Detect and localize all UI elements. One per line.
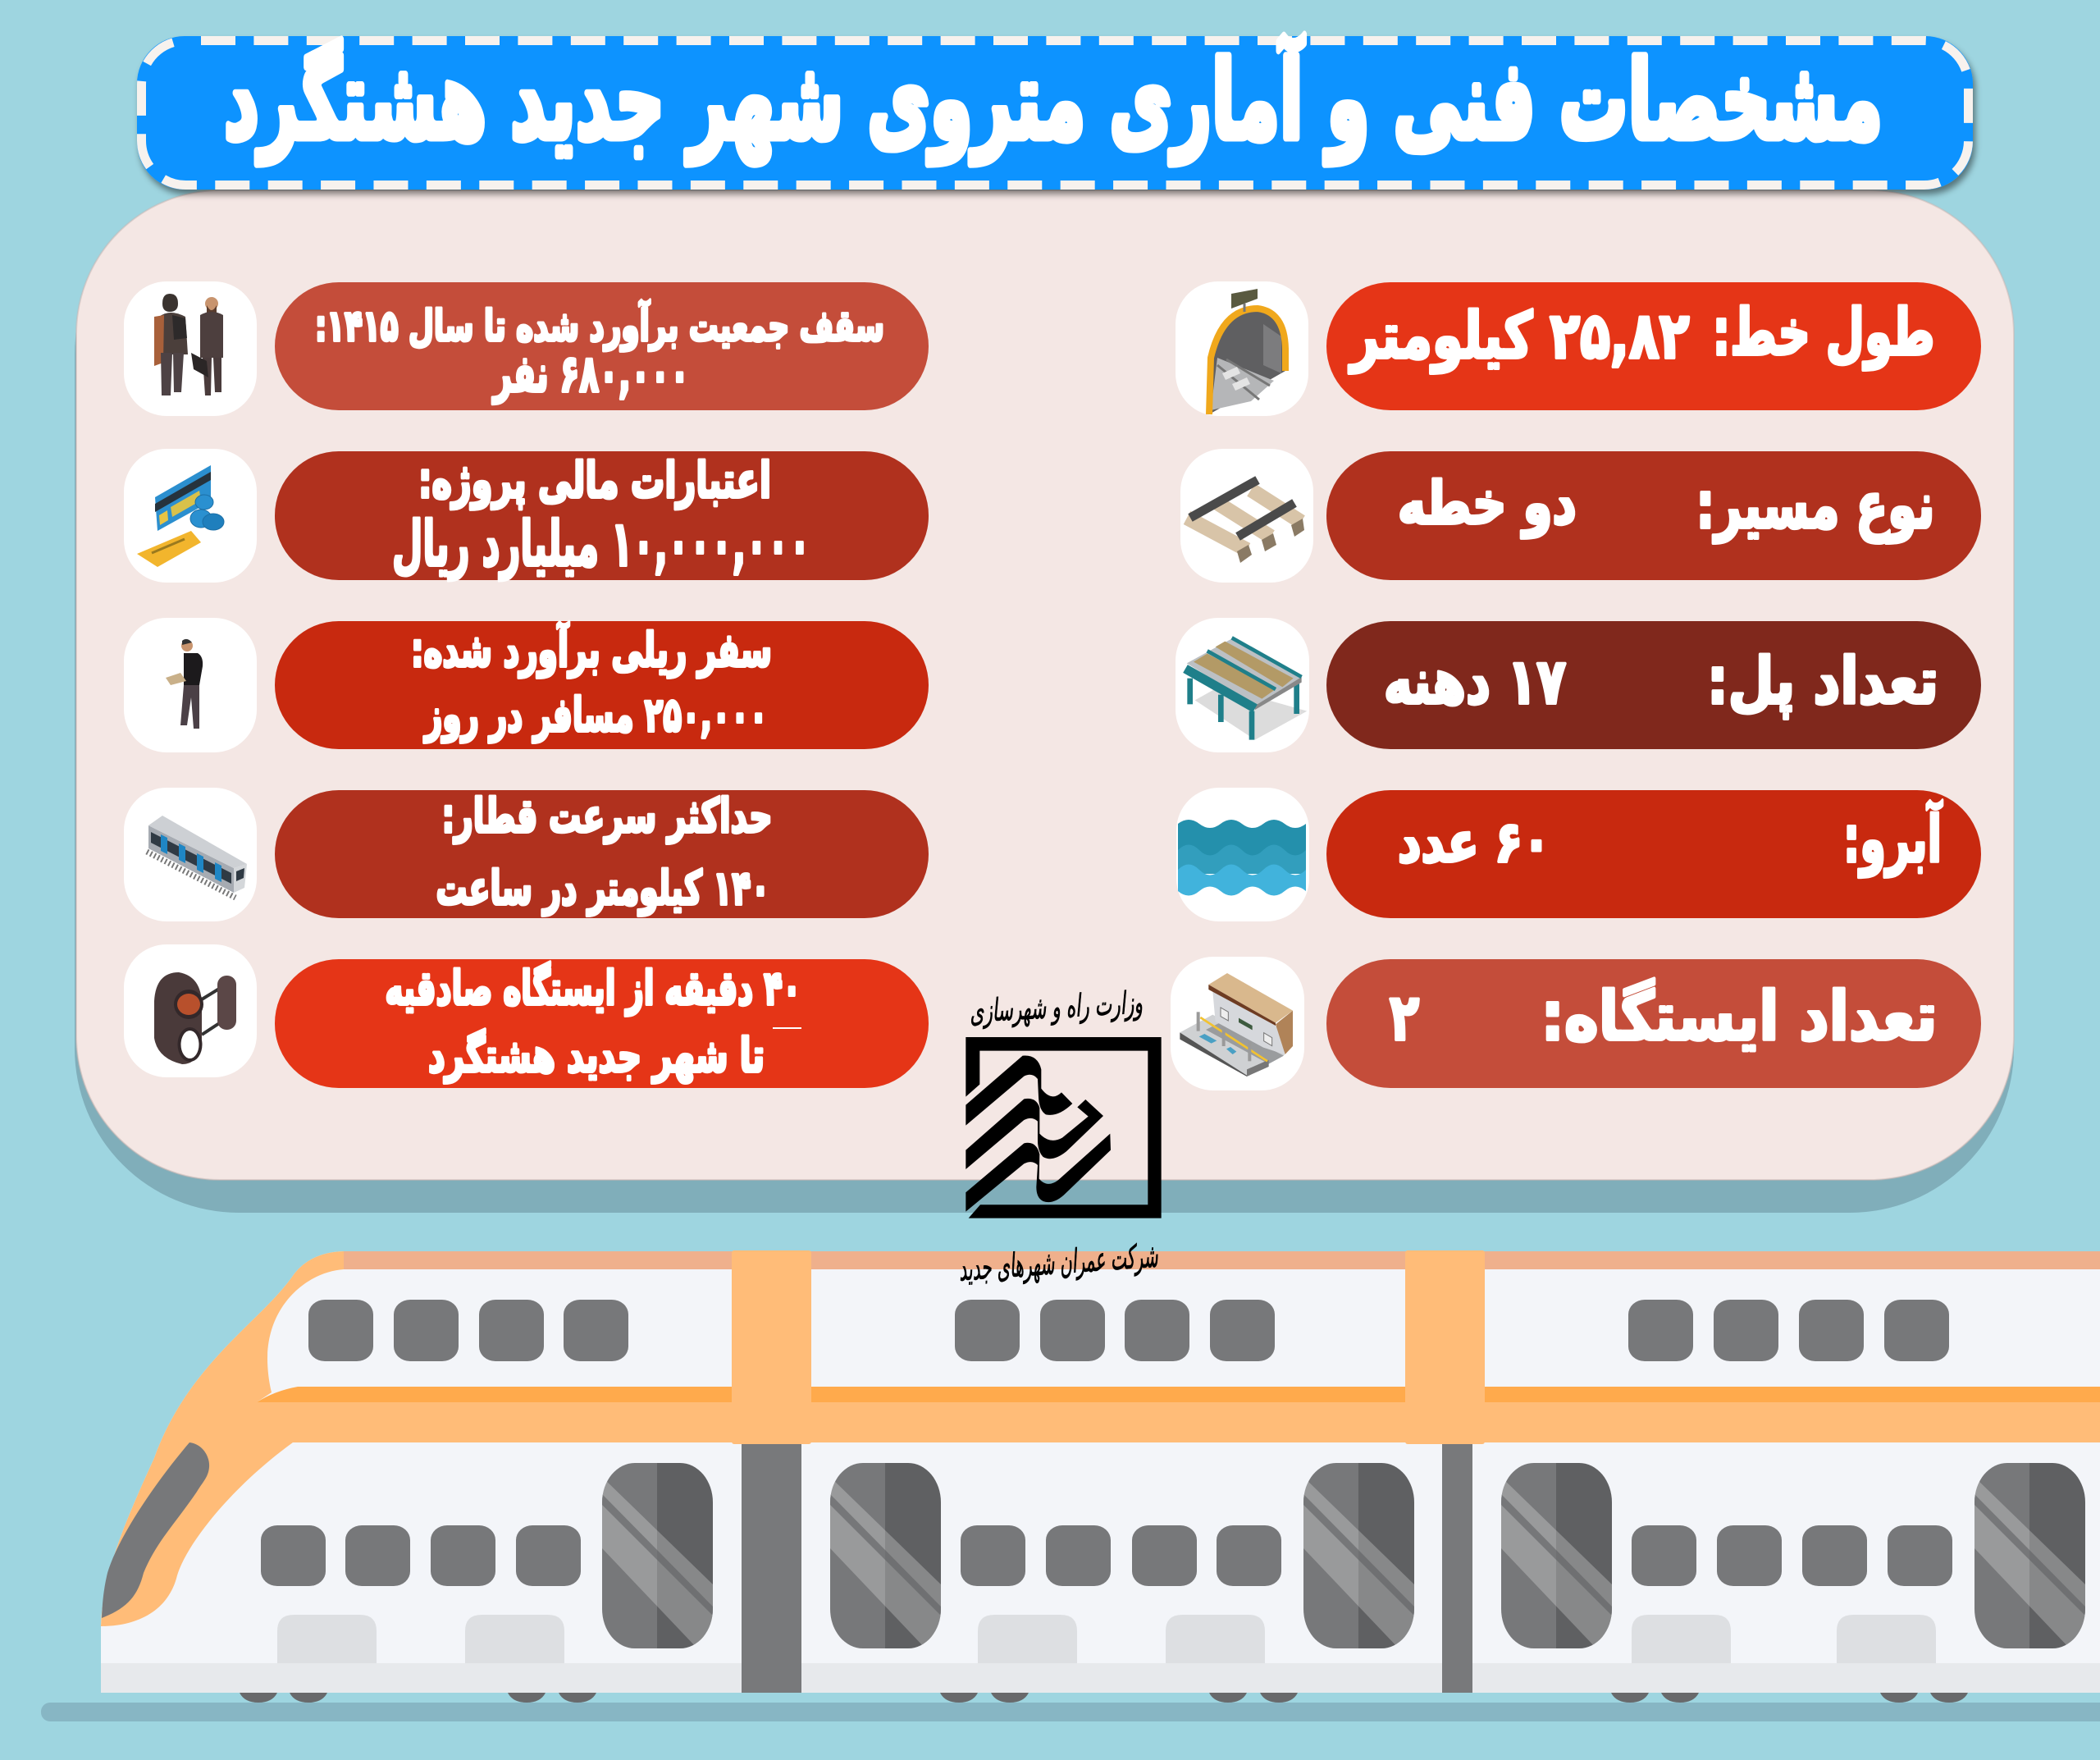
logo xyxy=(957,985,1162,1288)
icon: rail track xyxy=(1180,449,1313,583)
train xyxy=(101,1250,2100,1703)
trips label: سفر ریلی برآورد شده: xyxy=(411,621,772,678)
travel time line 2: تا شهر جدید هشتگرد xyxy=(428,1029,765,1083)
train body xyxy=(101,1251,2100,1693)
train roof strip xyxy=(344,1251,2100,1269)
row left 5: travel time xyxy=(275,959,929,1088)
route label: نوع مسیر: xyxy=(1696,469,1934,543)
icon: card and coins xyxy=(124,449,257,583)
trips value: ۲۵۰,۰۰۰ مسافر در روز xyxy=(423,688,768,743)
icon: rail signal xyxy=(124,944,257,1077)
row left 4: max speed xyxy=(275,789,929,918)
train connectors xyxy=(732,1250,1485,1693)
logo bottom caption: شرکت عمران شهرهای جدید xyxy=(957,1237,1159,1288)
stations value: ۲ xyxy=(1390,981,1419,1055)
train under-panels xyxy=(277,1615,1936,1663)
icon: man with map xyxy=(124,618,257,752)
row right 5: stations xyxy=(1326,959,1981,1088)
train upper windows xyxy=(308,1300,1949,1361)
logo top caption: وزارت راه و شهرسازی xyxy=(969,985,1144,1031)
budget value: ۱۰,۰۰۰,۰۰۰ میلیارد ریال xyxy=(392,507,810,581)
rail track bar xyxy=(41,1703,2100,1721)
population label: سقف جمعیت برآورد شده تا سال ۱۴۱۵: xyxy=(315,299,884,351)
row left 1: population xyxy=(275,282,929,410)
icon: two men xyxy=(124,281,257,416)
stations label: تعداد ایستگاه: xyxy=(1541,978,1938,1056)
train doors xyxy=(602,1463,2085,1665)
length value: ۲۵,۸۲ کیلومتر xyxy=(1348,299,1690,373)
row left 2: budget xyxy=(275,451,929,581)
row right 1: line length xyxy=(1326,282,1981,410)
icon: bridge xyxy=(1176,618,1309,752)
length label: طول خط: xyxy=(1713,296,1934,370)
budget label: اعتبارات مالی پروژه: xyxy=(418,452,771,510)
bridges label: تعداد پل: xyxy=(1707,645,1938,719)
bridges value: ۱۷ دهنه xyxy=(1384,645,1566,718)
logo mark xyxy=(966,1037,1162,1218)
train lower windows xyxy=(261,1525,1952,1586)
row right 2: route type xyxy=(1326,451,1981,580)
travel time line 1: ۴۰ دقیقه از ایستگاه صادقیه xyxy=(386,962,801,1016)
panel shadow xyxy=(75,190,2014,1213)
row right 3: bridges xyxy=(1326,621,1981,749)
icon: metro train xyxy=(124,788,257,921)
culvert value: ۶۰ عدد xyxy=(1398,811,1550,875)
panel: content card xyxy=(76,190,2014,1180)
train wheels xyxy=(240,1693,1968,1703)
train skirt xyxy=(101,1663,2100,1693)
icon: water waves xyxy=(1176,788,1309,921)
speed label: حداکثر سرعت قطار: xyxy=(441,789,773,843)
route value: دو خطه xyxy=(1398,469,1577,538)
icon: station xyxy=(1171,957,1304,1090)
culvert label: آبرو: xyxy=(1843,800,1942,877)
train orange livery xyxy=(101,1251,2100,1626)
icon: tunnel xyxy=(1176,281,1308,416)
train windshield xyxy=(102,1442,209,1618)
train darker stripe xyxy=(257,1387,2100,1402)
title banner xyxy=(137,34,1973,190)
population value: ۶۸۰,۰۰۰ نفر xyxy=(492,344,689,404)
row right 4: culverts xyxy=(1326,790,1981,918)
row left 3: rail trips xyxy=(275,621,929,749)
speed value: ۱۴۰ کیلومتر در ساعت xyxy=(436,862,769,916)
